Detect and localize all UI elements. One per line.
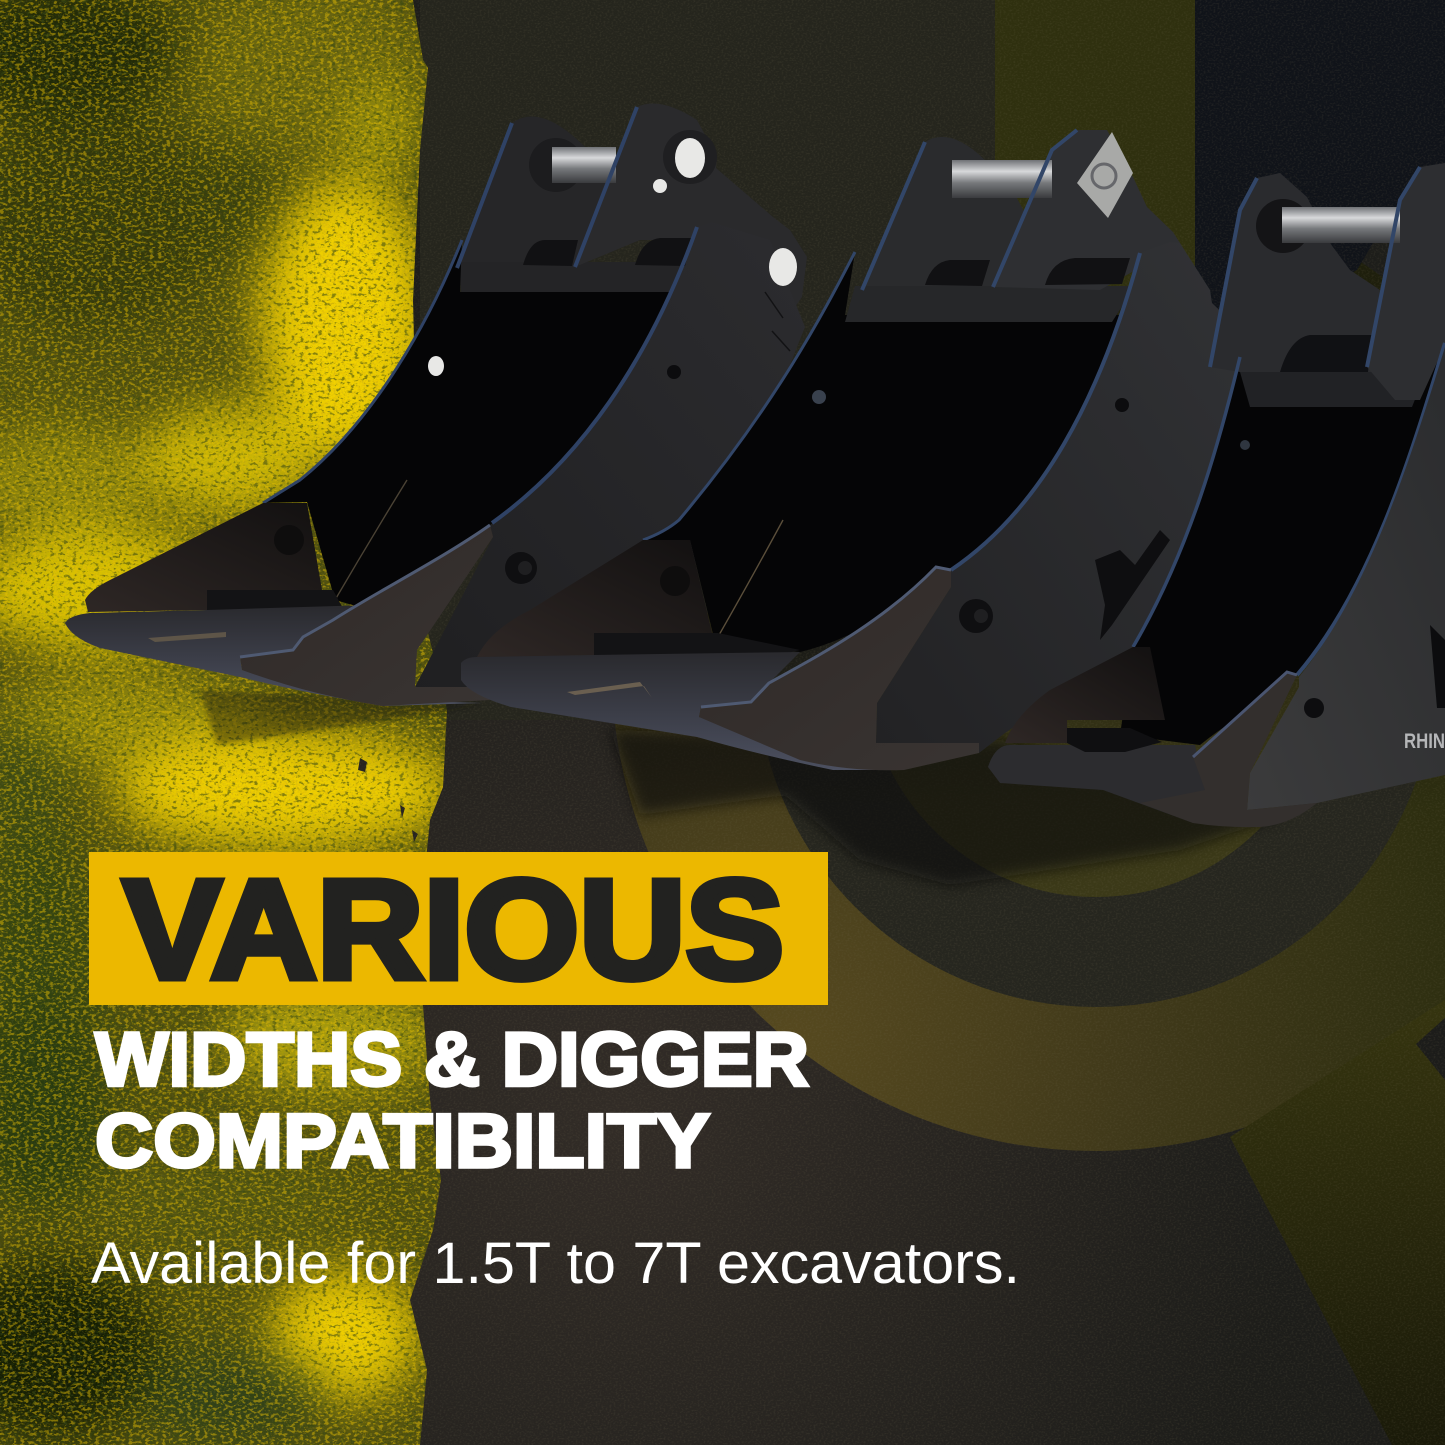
bucket 2: cross tube recesses <box>925 258 1130 286</box>
bucket 1: teeth plate <box>207 590 345 620</box>
bucket 1: blue edge highlights <box>263 107 697 523</box>
heading: VARIOUS: VARIOUS <box>123 850 784 1008</box>
bucket 1: left side wedge <box>85 503 322 612</box>
bucket 3: lip <box>988 745 1260 827</box>
bucket 2 (centre) <box>461 130 1240 770</box>
background: upper right dark corner <box>1195 0 1445 360</box>
bucket 1: pin collar <box>529 138 583 192</box>
bucket 3: mounting ear, right <box>1367 163 1445 400</box>
bucket 1: right side wedge <box>240 525 493 706</box>
bucket 3: interior <box>1120 340 1445 745</box>
heading: WIDTHS & DIGGER: WIDTHS & DIGGER <box>95 1018 809 1102</box>
background: large faint R logo <box>615 0 1445 1445</box>
bucket 1: bolts <box>274 525 304 555</box>
bucket 2: mounting ear, right <box>993 130 1180 290</box>
bucket 3: pin collar <box>1256 199 1310 253</box>
bucket 3: hole <box>1240 440 1250 450</box>
bucket 1: cross tube recesses <box>523 238 692 266</box>
bucket 1: plate details <box>765 292 790 351</box>
bucket 3: pin <box>1282 207 1400 243</box>
bucket 2: lip <box>461 652 904 770</box>
bucket 3: teeth plate <box>1067 728 1162 752</box>
subheading text: Available for 1.5T to 7T excavators. <box>91 1231 1020 1296</box>
bucket 2: blue edge highlights <box>643 130 1140 570</box>
bucket 2: stencil logo <box>1095 530 1170 640</box>
bucket 1: interior <box>263 240 682 610</box>
bucket 2: teeth plate <box>594 633 800 665</box>
bucket 3: stencil logo <box>1430 625 1445 708</box>
dark specks along paint edge <box>358 758 418 842</box>
bucket 1: mounting ear, right with lug <box>575 104 807 390</box>
bucket 2: pin <box>952 160 1052 198</box>
bucket 1: crossbar <box>458 262 694 298</box>
bucket 3: blue edge highlights <box>1133 167 1445 675</box>
bucket 3: cross tube recess <box>1280 335 1372 372</box>
bucket 2: bolts <box>660 566 690 596</box>
bucket 2: steel lug <box>1077 132 1133 218</box>
heading: COMPATIBILITY: COMPATIBILITY <box>95 1099 710 1184</box>
bucket 1: right side plate <box>415 222 805 700</box>
bucket 2: left side wedge <box>477 540 712 657</box>
bucket 3: left side wedge <box>1005 647 1165 743</box>
bucket 3: bolt <box>1304 698 1324 718</box>
background grain <box>420 0 1445 1445</box>
bucket 2: holes <box>812 390 826 404</box>
shadows cast by buckets <box>200 690 1285 885</box>
bucket 2: right side wedge <box>699 567 979 770</box>
bucket 1: inner seam <box>335 480 407 600</box>
background: upper dark field <box>420 0 995 720</box>
heading block <box>89 850 828 1184</box>
bucket 1: mounting ear, left <box>457 117 612 268</box>
bucket 3: right side wedge <box>1140 672 1317 827</box>
bucket 2: mounting ear, left <box>862 137 1026 292</box>
background: yellow and green distressed paint <box>0 0 470 1445</box>
bucket 1: pin <box>552 147 616 183</box>
bucket 1 (left) <box>65 104 807 706</box>
bucket 2: interior <box>643 252 1125 652</box>
background: upper olive stem <box>995 0 1195 300</box>
bucket 1: white bolt heads <box>428 138 797 376</box>
bucket 2: inner seam <box>715 520 783 642</box>
bucket 3: mounting ear, left <box>1210 173 1380 372</box>
bucket 2: right side plate <box>876 242 1240 753</box>
bucket 2: crossbar <box>845 286 1135 322</box>
heading highlight bar <box>89 852 828 1005</box>
bucket 1: pin end disc <box>663 130 717 184</box>
bucket 3: right side plate <box>1247 347 1445 810</box>
bucket 3: crossbar <box>1240 372 1426 407</box>
bucket 3 (right, cropped) <box>988 163 1445 827</box>
bucket 1: lip <box>65 605 483 706</box>
